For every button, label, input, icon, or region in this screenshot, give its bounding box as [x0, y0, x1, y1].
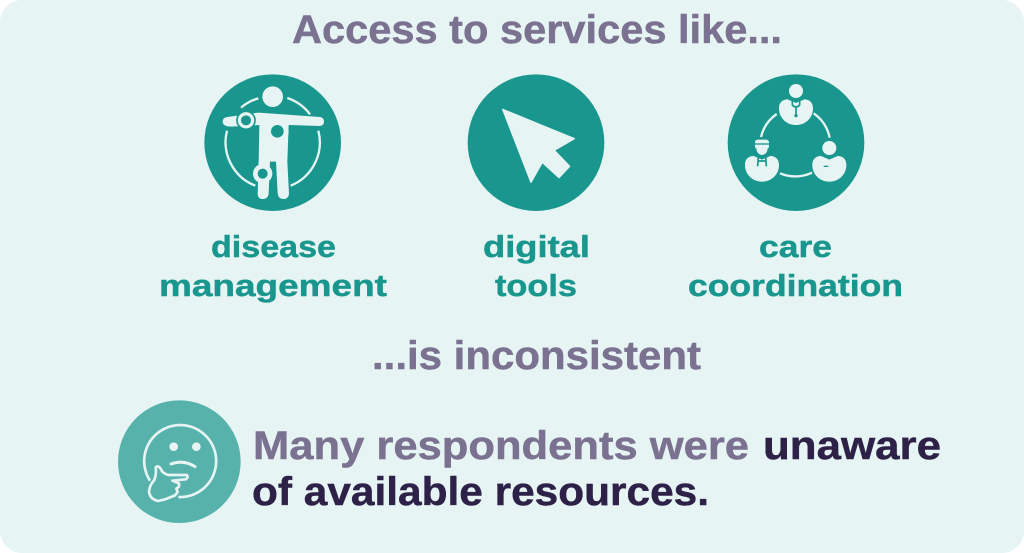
label: disease management: [159, 229, 387, 303]
label: disease management: disease: [211, 229, 336, 264]
callout text: [252, 424, 941, 514]
label: care coordination: care: [759, 229, 832, 264]
label: care coordination: coordination: [688, 268, 903, 303]
icon: cursor for digital tools: [468, 74, 604, 211]
title: Access to services like...: [292, 8, 782, 52]
icon: disease management: [204, 74, 341, 211]
callout text: of available resources.: [252, 470, 709, 514]
callout text: unaware: [763, 424, 941, 468]
icon: thinking face: [118, 400, 241, 523]
callout text: Many respondents were: [253, 424, 749, 468]
label: digital tools: tools: [495, 268, 577, 303]
label: disease management: management: [159, 268, 387, 303]
label: care coordination: [688, 229, 903, 303]
icon: care coordination team: [728, 74, 864, 211]
label: digital tools: digital: [483, 229, 590, 264]
label: digital tools: [483, 229, 590, 303]
subheading: ...is inconsistent: [372, 334, 701, 378]
